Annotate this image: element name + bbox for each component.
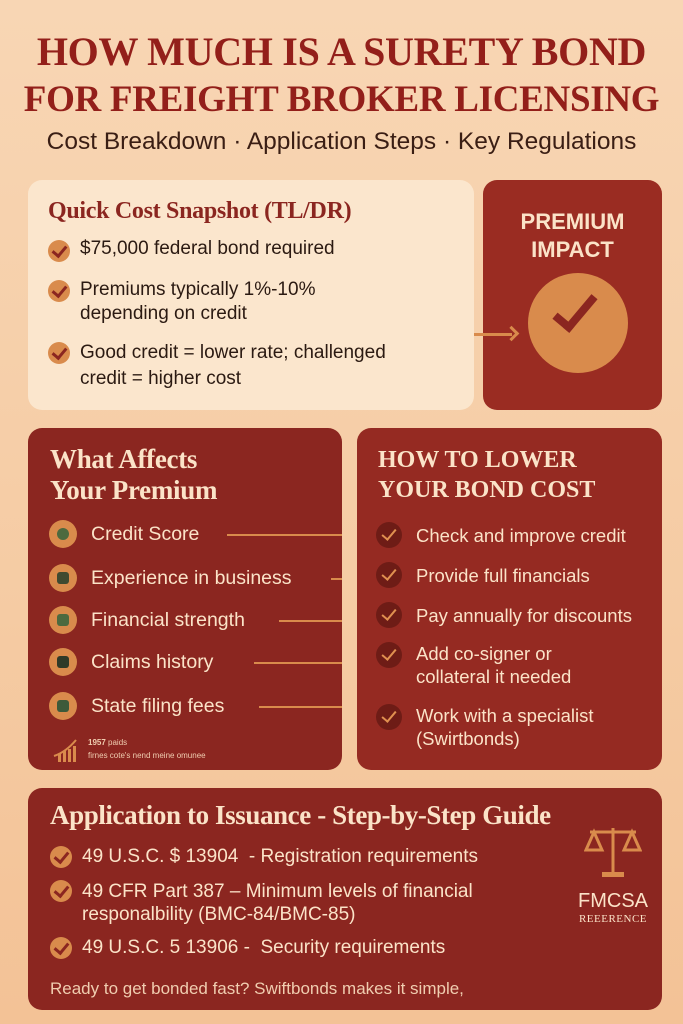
title <box>24 29 659 120</box>
icon: growth chart and note <box>54 738 206 762</box>
tip 5 <box>376 704 594 749</box>
heading: premium impact: IMPACT <box>531 237 614 262</box>
heading: what affects: Your Premium <box>50 475 217 505</box>
heading: what affects: What Affects <box>50 444 197 474</box>
heading: lower cost: YOUR BOND COST <box>378 477 595 503</box>
factor: credit score <box>49 520 342 548</box>
panel: how to lower bond cost <box>357 428 662 770</box>
factor: claims history: Claims history <box>91 651 213 673</box>
panel: quick cost snapshot <box>28 180 474 410</box>
panel: what affects premium <box>28 428 342 770</box>
tip 5: (Swirtbonds) <box>416 728 520 749</box>
item 3: credit = higher cost <box>80 368 241 389</box>
tip 4 <box>376 642 571 687</box>
call to action: Ready to get bonded fast? Swiftbonds makes it simple, <box>50 979 464 998</box>
heading: snapshot: Quick Cost Snapshot (TL/DR) <box>48 198 351 224</box>
item 2: depending on credit <box>80 303 247 324</box>
panel: premium impact <box>483 180 662 410</box>
heading: application guide: Application to Issuance - Step-by-Step Guide <box>50 800 551 830</box>
tip 1: Check and improve credit <box>416 525 626 546</box>
heading: what affects <box>50 444 218 505</box>
tip 3: Pay annually for discounts <box>416 605 632 626</box>
item 1: $75,000 federal bond required <box>80 238 335 259</box>
title: HOW MUCH IS A SURETY BOND <box>37 29 646 74</box>
heading: premium impact: PREMIUM <box>521 209 624 234</box>
heading: lower cost <box>378 447 596 503</box>
item 2 <box>48 279 315 324</box>
heading: lower cost: HOW TO LOWER <box>378 447 577 473</box>
regulation 2 <box>50 880 473 925</box>
tip 2 <box>376 562 590 588</box>
tip 4: Add co-signer or <box>416 643 552 664</box>
FMCSA reference label <box>578 890 648 925</box>
arrow <box>474 326 520 342</box>
regulation 2: 49 CFR Part 387 – Minimum levels of financial <box>82 881 473 902</box>
factor: claims history <box>49 648 342 676</box>
tip 2: Provide full financials <box>416 565 590 586</box>
item 3: Good credit = lower rate; challenged <box>80 342 386 363</box>
item 2: Premiums typically 1%-10% <box>80 279 315 300</box>
FMCSA reference label: REEERENCE <box>579 913 647 925</box>
icon: growth chart and note: firnes cote's nend meine omunee <box>88 751 206 760</box>
factor: financial strength <box>49 606 342 634</box>
tip 4: collateral it needed <box>416 666 571 687</box>
regulation 2: responalbility (BMC-84/BMC-85) <box>82 904 355 925</box>
icon: growth chart and note: 1957 paids <box>88 738 127 747</box>
FMCSA reference label: FMCSA <box>578 890 648 912</box>
factor: experience <box>49 564 342 592</box>
icon: check circle <box>528 273 628 373</box>
tip 5: Work with a specialist <box>416 705 594 726</box>
tip 3 <box>376 602 632 628</box>
panel: application to issuance <box>28 788 662 1010</box>
subtitle: Cost Breakdown · Application Steps · Key Regulations <box>47 128 636 155</box>
icon: scales <box>584 828 642 877</box>
factor: experience: Experience in business <box>91 567 292 589</box>
regulation 3: 49 U.S.C. 5 13906 - Security requirements <box>82 937 445 958</box>
factor: credit score: Credit Score <box>91 523 199 545</box>
regulation 1: 49 U.S.C. $ 13904 - Registration requirements <box>82 846 478 867</box>
tip 1 <box>376 522 626 548</box>
factor: state filing fees: State filing fees <box>91 695 224 717</box>
heading: premium impact <box>521 209 624 262</box>
item 3 <box>48 342 386 389</box>
factor: financial strength: Financial strength <box>91 609 245 631</box>
title: FOR FREIGHT BROKER LICENSING <box>24 79 659 120</box>
factor: state filing fees <box>49 692 342 720</box>
